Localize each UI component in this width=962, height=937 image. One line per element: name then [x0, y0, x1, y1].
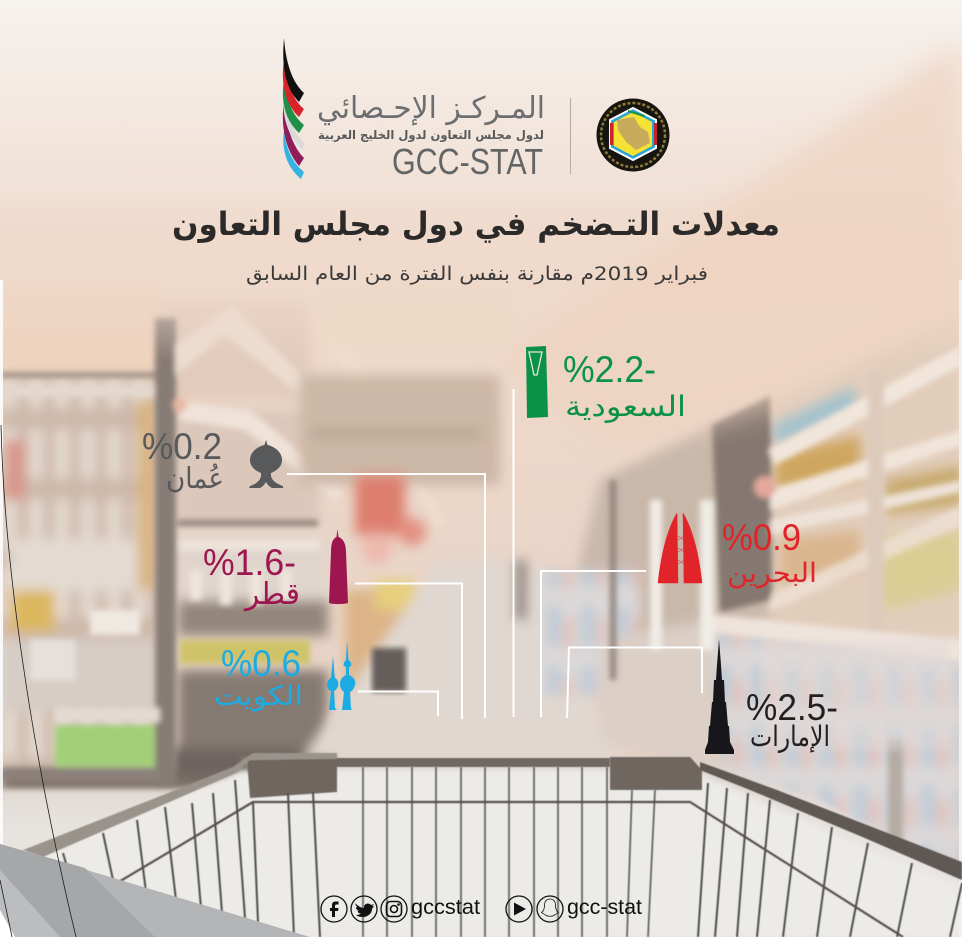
icon: Bahrain towers: [658, 513, 702, 583]
title: معدلات التـضخم في دول مجلس التعاون: [172, 205, 780, 243]
logo divider: [570, 98, 571, 174]
cart rim: [23, 753, 337, 857]
Kuwait value: %0.6: [221, 643, 301, 684]
Bahrain name: البحرين: [727, 558, 817, 589]
icon: Burj Khalifa: [705, 639, 734, 754]
grey corner shape: [0, 844, 310, 937]
icon: twitter: [351, 896, 377, 922]
Kuwait name: الكويت: [214, 681, 303, 712]
cart wires: [63, 767, 962, 937]
handle: gcc-stat: gcc-stat: [567, 896, 642, 919]
icon: Kuwait towers: [327, 640, 355, 710]
emblem: GCC seal: [596, 98, 670, 172]
centre background: [300, 285, 620, 760]
UAE name: الإمارات: [750, 720, 830, 753]
Saudi name: السعودية: [565, 390, 686, 423]
shopping cart: [23, 753, 962, 937]
item: UAE: [705, 639, 838, 754]
item: Saudi Arabia: [526, 346, 686, 423]
icon: youtube play: [506, 896, 532, 922]
handle: gccstat: gccstat: [411, 896, 480, 919]
icon: Qatar tower: [329, 529, 348, 604]
left shelves: [0, 280, 330, 792]
connector lines: [287, 389, 702, 719]
logo: ribbons: [283, 38, 304, 179]
floor and cart interior: [0, 760, 962, 937]
Qatar name: قطر: [243, 577, 300, 612]
item: Qatar: [203, 529, 348, 612]
icon: Oman monument: [249, 440, 283, 488]
icon: instagram: [381, 896, 407, 922]
social media footer: [321, 896, 642, 922]
Qatar value: %1.6-: [203, 542, 296, 583]
Oman value: %0.2: [142, 426, 222, 467]
UAE value: %2.5-: [746, 687, 838, 728]
item: Kuwait: [214, 640, 355, 712]
item: Oman: [142, 426, 283, 495]
logo: GCC-STAT: GCC-STAT: [392, 141, 543, 182]
fade into header: [0, 190, 962, 360]
right side: [540, 310, 962, 890]
thin black curve: [0, 425, 76, 937]
icon: facebook: [321, 896, 347, 922]
item: Bahrain: [658, 513, 817, 589]
logo: Arabic subtitle: لدول مجلس التعاون لدول الخليج العربية: [318, 128, 544, 143]
Oman name: عُمان: [166, 461, 224, 495]
subtitle: فبراير 2019م مقارنة بنفس الفترة من العام السابق: [246, 263, 708, 285]
icon: Saudi tower: [526, 346, 548, 418]
logo: Arabic organisation name: المـركـز الإحـصائي: [317, 91, 545, 126]
cart back panels: [247, 757, 337, 798]
ceiling glow: [500, 40, 962, 450]
Saudi value: %2.2-: [563, 349, 656, 390]
Bahrain value: %0.9: [722, 517, 801, 558]
icon: snapchat: [537, 896, 563, 922]
